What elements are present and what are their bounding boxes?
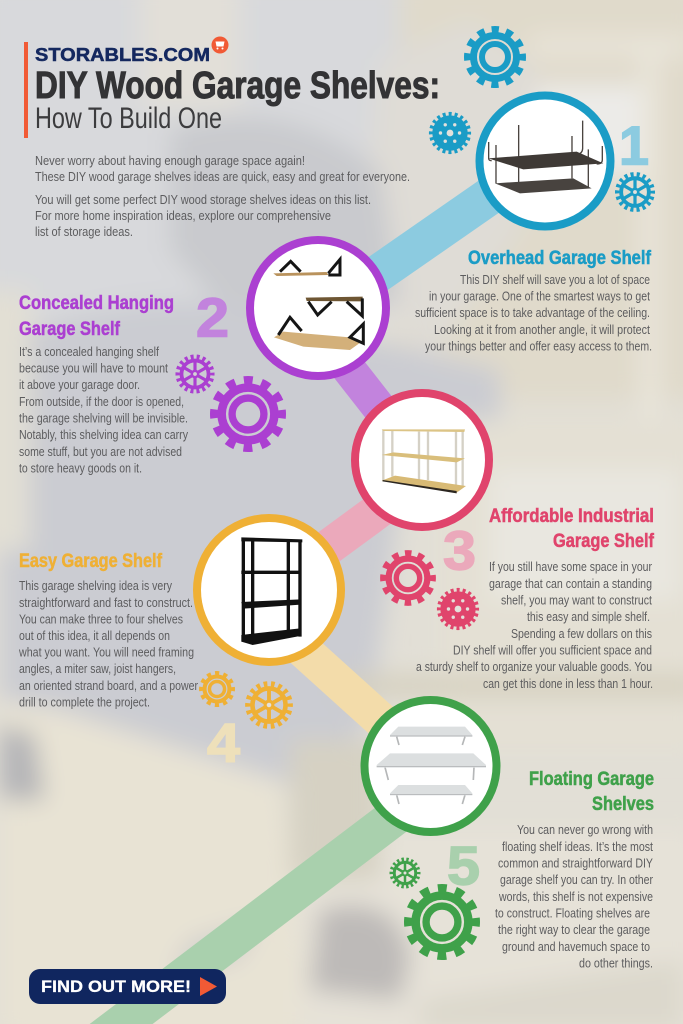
description: This garage shelving idea is very — [19, 578, 172, 593]
panel: affordable industrial garage shelf — [355, 393, 655, 691]
description: to store heavy goods on it. — [19, 460, 142, 476]
header — [24, 36, 440, 138]
panel: floating garage shelves — [364, 700, 654, 970]
heading — [529, 769, 654, 815]
description: It’s a concealed hanging shelf — [19, 344, 159, 359]
heading: Concealed Hanging — [19, 293, 174, 314]
description: what you want. You will need framing — [18, 644, 194, 660]
number 1: 1 — [619, 114, 649, 176]
description: some stuff, but you are not advised — [19, 444, 182, 459]
gear: wheel — [617, 174, 653, 210]
description: garage that can contain a standing — [489, 576, 652, 591]
number 5: 5 — [447, 834, 480, 896]
description — [416, 559, 653, 691]
gear: wheel — [391, 859, 419, 887]
description: You can make three to four shelves — [19, 612, 183, 626]
description: the right way to clear the garage — [498, 922, 650, 937]
intro text — [35, 153, 410, 239]
heading: Easy Garage Shelf — [19, 551, 163, 572]
button: find out more: FIND OUT MORE! — [41, 977, 191, 996]
gear: wheel — [178, 357, 212, 391]
description: to construct. Floating shelves are — [495, 906, 650, 920]
description: From outside, if the door is opened, — [19, 394, 184, 409]
description: out of this idea, it all depends on — [19, 628, 170, 643]
description: shelf, you may want to construct — [501, 592, 652, 608]
description: the garage shelving will be invisible. — [19, 410, 188, 426]
description: because you will have to mount — [19, 360, 168, 376]
heading — [489, 506, 655, 552]
number 2: 2 — [196, 286, 229, 348]
panel: easy garage shelf — [18, 518, 341, 773]
description — [495, 822, 654, 970]
intro text: You will get some perfect DIY wood storage shelves ideas on this list. — [35, 192, 371, 207]
gear: ring — [215, 381, 281, 447]
image: wood shelves with brackets — [273, 259, 363, 350]
accent bar — [24, 42, 28, 138]
circle frame — [250, 240, 386, 376]
description — [18, 578, 199, 710]
description: Notably, this shelving idea can carry — [19, 427, 188, 442]
heading: Overhead Garage Shelf — [468, 248, 652, 269]
title: DIY Wood Garage Shelves: — [35, 65, 440, 107]
gear: solid — [431, 114, 469, 152]
image: metal floating shelves — [377, 727, 486, 804]
circle frame — [480, 96, 610, 226]
number 3: 3 — [443, 519, 476, 581]
image: black shelving unit — [241, 537, 302, 645]
intro text: These DIY wood garage shelves ideas are quick, easy and great for everyone. — [35, 169, 410, 184]
icon: cart badge — [212, 36, 228, 54]
heading: Floating Garage — [529, 769, 654, 790]
description: straightforward and fast to construct. — [19, 595, 193, 610]
panel: overhead garage shelf — [415, 30, 653, 354]
image: overhead shelf — [488, 121, 603, 193]
brand name: STORABLES.COM — [35, 45, 210, 65]
heading: Garage Shelf — [19, 319, 121, 340]
heading: Affordable Industrial — [489, 506, 654, 527]
intro text: list of storage ideas. — [35, 224, 133, 239]
intro text: For more home inspiration ideas, explore our comprehensive — [35, 208, 331, 223]
image: light wood shelving unit — [382, 429, 466, 493]
icon: play arrow — [200, 977, 217, 996]
subtitle: How To Build One — [35, 102, 222, 135]
description: Spending a few dollars on this — [511, 626, 652, 641]
heading: Shelves — [592, 794, 654, 815]
description: this easy and simple shelf. — [527, 609, 650, 624]
description — [415, 272, 652, 354]
button: find out more — [29, 969, 226, 1004]
gear: ring — [201, 673, 233, 705]
description: do other things. — [579, 956, 653, 970]
description: drill to complete the project. — [19, 694, 150, 710]
description: You can never go wrong with — [517, 822, 653, 837]
number 4: 4 — [207, 711, 240, 773]
description — [19, 344, 188, 476]
gear: ring — [409, 889, 475, 955]
heading — [19, 293, 174, 340]
description: ground and havemuch space to — [502, 939, 650, 954]
gear: wheel — [248, 684, 290, 726]
description: common and straightforward DIY — [498, 856, 653, 870]
description: floating shelf ideas. It’s the most — [502, 839, 653, 854]
circle frame — [364, 700, 496, 832]
gear: ring — [468, 30, 522, 84]
circle frame — [197, 518, 341, 662]
description: angles, a miter saw, joist hangers, — [19, 661, 176, 676]
description: it above your garage door. — [19, 377, 140, 392]
intro text: Never worry about having enough garage space again! — [35, 153, 305, 168]
panel: concealed hanging garage shelf — [19, 240, 386, 476]
gear: ring — [384, 554, 432, 602]
description: an oriented strand board, and a power — [19, 678, 199, 693]
heading: Garage Shelf — [553, 531, 655, 552]
gear: solid — [439, 590, 477, 628]
circle frame — [355, 393, 489, 527]
connecting bands — [100, 175, 520, 1024]
